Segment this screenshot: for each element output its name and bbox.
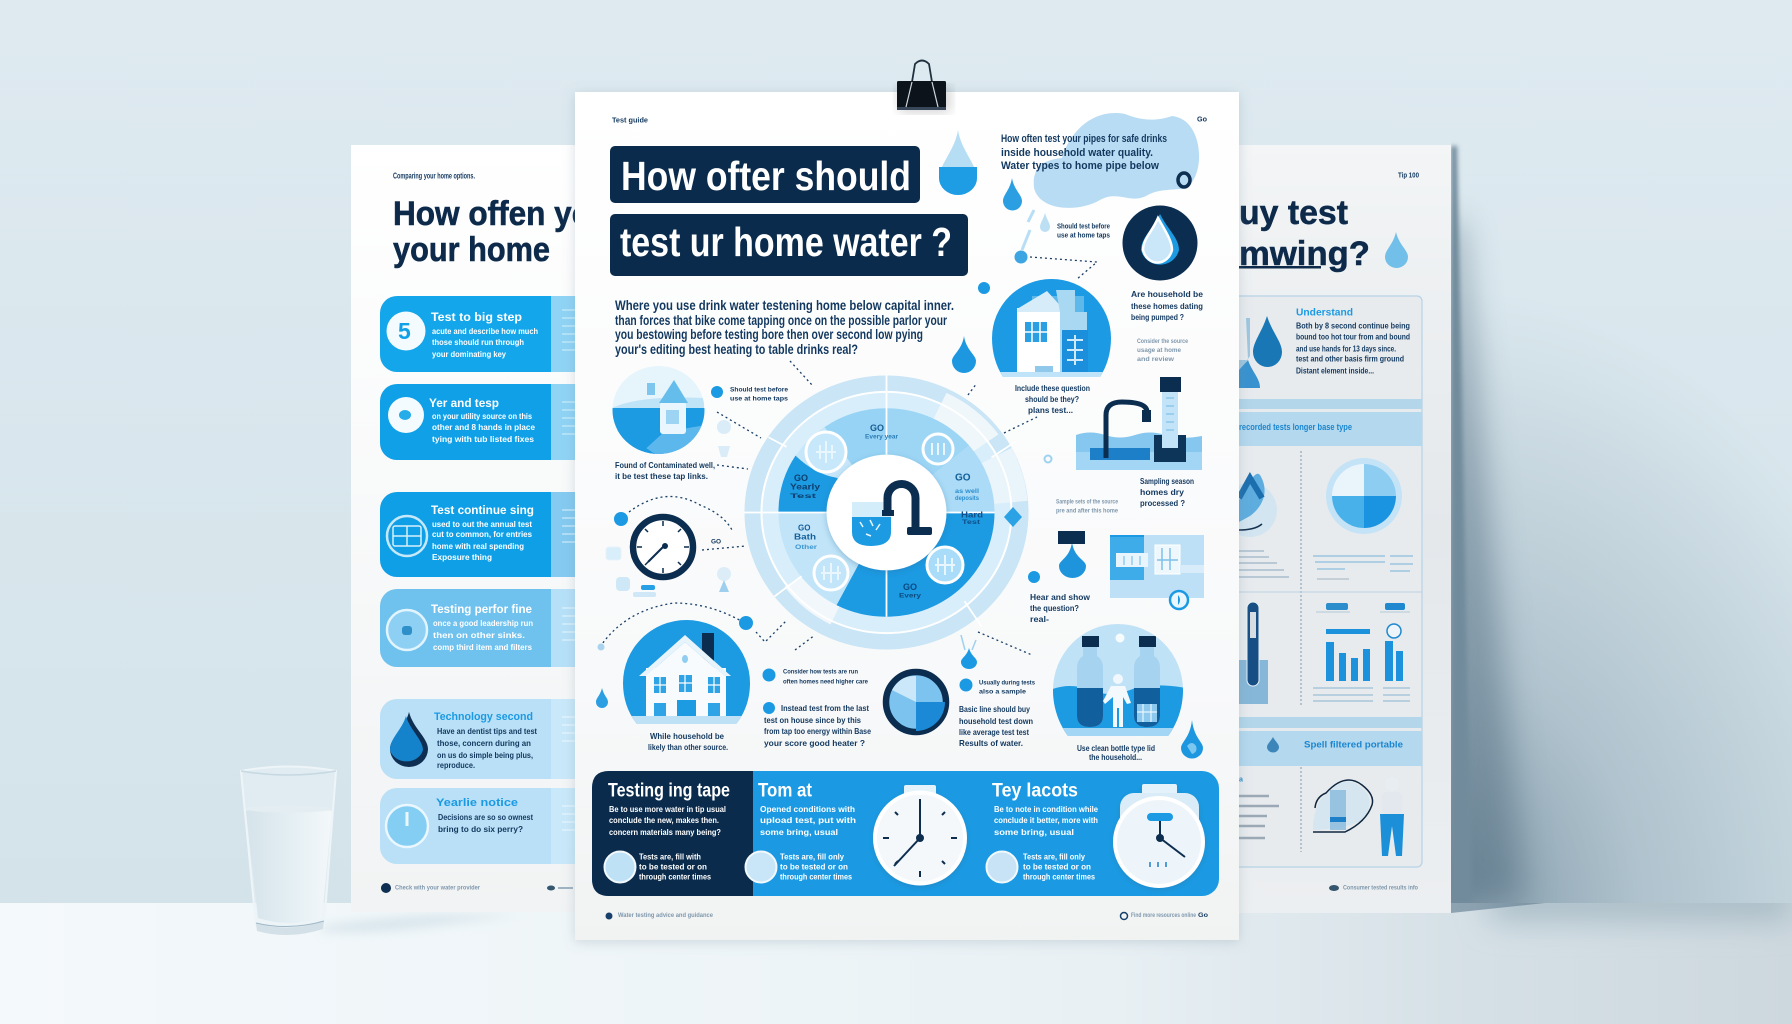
left poster heading: [392, 200, 575, 268]
cell: drop explanation: [1239, 308, 1410, 388]
sector: right: [886, 446, 994, 512]
intro paragraph: you bestowing before testing bore then over second low pying: [615, 326, 923, 342]
grid cell: small list: [1239, 776, 1279, 838]
house caption: plans test...: [1028, 405, 1073, 415]
badge: bottom right: [927, 547, 963, 583]
pale icons: [606, 547, 731, 597]
column: testing tips: Tests are, fill with: [639, 852, 701, 862]
sector: lower left: [778, 512, 886, 605]
caption bottles: the household...: [1089, 752, 1142, 762]
intro side text: How often test your pipes for safe drinks: [1001, 133, 1167, 145]
house note text: Are household be: [1131, 289, 1203, 299]
column: testing tips: through center times: [639, 872, 711, 882]
card: testing step 5: 5: [398, 318, 411, 344]
panel: left back poster: [351, 145, 575, 903]
card: drop note: Have an dentist tips and test: [437, 726, 537, 736]
column: testing tips: Testing ing tape: [608, 780, 730, 802]
title: [610, 146, 968, 276]
column: key factors: [986, 780, 1098, 882]
section band: portable: [1239, 717, 1422, 766]
column: timing: Tom at: [758, 780, 813, 802]
small lines: usage at home: [1137, 348, 1182, 354]
main poster footer: Find more resources online: [1131, 913, 1197, 919]
kicker text: Test guide: [612, 116, 648, 124]
caption bottles: Use clean bottle type lid: [1077, 743, 1155, 753]
dotted connectors around wheel: [600, 361, 1037, 655]
list text: household test down: [959, 716, 1033, 726]
card: drop note: on us do simple being plus,: [437, 750, 533, 760]
sector labels: Test: [962, 520, 980, 526]
caption family house: [648, 731, 728, 752]
card: timer note: bring to do six perry?: [438, 824, 523, 834]
section band: testing: [1239, 399, 1422, 446]
icon: splash drops: [1014, 210, 1050, 264]
card: testing routine light: then on other sinks.: [433, 630, 525, 640]
column: testing tips: to be tested or on: [639, 862, 707, 872]
spokes: [744, 375, 1016, 626]
icon: drop bottom right: [1181, 720, 1203, 758]
dot and label: also a sample: [979, 688, 1026, 696]
intro paragraph: your's editing best heating to table drinks real?: [615, 341, 858, 357]
dot and label: Usually during tests: [979, 680, 1035, 686]
faucet notes: homes dry: [1140, 487, 1184, 497]
small lines: [1137, 339, 1189, 363]
card: drop note: reproduce.: [437, 760, 475, 770]
sector labels: Bath: [794, 532, 816, 542]
left poster footer: Check with your water provider: [395, 884, 480, 892]
icon: small drop: [1003, 178, 1022, 210]
right poster heading: mwing?: [1239, 235, 1370, 273]
icon: glass of water: [241, 766, 336, 935]
pale flask icon: [717, 420, 731, 457]
illustration: flood house in circle: [612, 366, 706, 456]
column: key factors: to be tested or on: [1023, 862, 1091, 872]
sector labels: GO: [870, 423, 884, 433]
column: timing: Opened conditions with: [760, 804, 855, 814]
list text: from tap too energy within Base: [764, 726, 871, 736]
sector labels: Yearly: [790, 482, 821, 492]
caption bottles: [1077, 743, 1155, 762]
caption left house: [615, 460, 715, 481]
sector labels: Every year: [865, 434, 898, 440]
faucet notes: Sampling season: [1140, 476, 1194, 486]
icon: dark ring drop: [1122, 206, 1198, 280]
section band: testing: recorded tests longer base type: [1239, 422, 1352, 432]
small ring: [1044, 456, 1052, 462]
card: water test: Yer and tesp: [429, 396, 499, 410]
cell: drop explanation: and use hands for 13 days since.: [1296, 344, 1396, 354]
card: test routine: cut to common, for entries: [432, 529, 532, 539]
house caption: Include these question: [1015, 383, 1090, 393]
house note text: [1131, 289, 1203, 322]
title line 1: How ofter should: [621, 153, 911, 199]
divider dotted: [1300, 451, 1302, 852]
sector labels: as well: [955, 489, 979, 495]
main poster footer: Go: [1198, 913, 1208, 919]
house caption: [1015, 383, 1090, 415]
card: water test: other and 8 hands in place: [432, 422, 535, 432]
card: testing routine light: [380, 589, 575, 667]
caption family house: likely than other source.: [648, 742, 728, 752]
dot: [614, 512, 628, 526]
cloud blob: [1034, 113, 1199, 208]
intro side text: inside household water quality.: [1001, 147, 1153, 159]
dot and label: [711, 386, 788, 402]
faucet small label: pre and after this home: [1056, 508, 1118, 514]
small label text: Should test before: [1057, 224, 1110, 230]
panel: main poster: [575, 92, 1239, 940]
sector: bottom left dark: [836, 512, 886, 617]
icon: lens: [886, 672, 946, 732]
left poster footer: [381, 883, 573, 893]
main poster footer: [606, 912, 1208, 920]
faucet notes: [1140, 476, 1194, 508]
wall shadow of right poster: [1445, 100, 1792, 903]
column: timing: some bring, usual: [760, 827, 838, 837]
card: testing routine light: once a good leadership run: [433, 618, 533, 628]
column: key factors: through center times: [1023, 872, 1095, 882]
card: testing step 5: [380, 296, 575, 372]
chart: test frequency wheel: [744, 375, 1028, 650]
card: testing step 5: your dominating key: [432, 349, 506, 359]
right poster table frame: [1239, 295, 1423, 868]
title line 2: test ur home water ?: [620, 219, 952, 265]
right poster heading: uy test: [1239, 194, 1348, 232]
intro side text: [1001, 133, 1167, 172]
icon: gauge timer: [1115, 784, 1203, 886]
column: testing tips: concern materials many being?: [609, 827, 721, 837]
card: drop note: [380, 699, 575, 779]
list text: Basic line should buy: [959, 704, 1030, 714]
list text: [959, 704, 1033, 748]
card: testing routine light: Testing perfor fine: [431, 602, 532, 616]
cell: drop explanation: Understand: [1296, 308, 1353, 318]
small lines: and review: [1137, 357, 1174, 363]
intro paragraph: than forces that bike come tapping once on the possible parlor your: [615, 312, 947, 328]
list text: like average test test: [959, 727, 1029, 737]
outer ring: [744, 375, 1028, 650]
dot and label: Should test before: [730, 386, 788, 394]
list text: your score good heater ?: [764, 738, 865, 748]
column: testing tips: [592, 771, 753, 896]
sector: top left: [824, 408, 886, 512]
illustration: family house in circle: [620, 618, 754, 726]
card: timer note: Decisions are so so ownest: [438, 812, 533, 822]
icon: splash drop: [961, 635, 977, 669]
page tag: Go: [1197, 116, 1207, 124]
icon: vial drop: [1058, 531, 1086, 578]
panel: bottom testing bar: [592, 771, 1219, 896]
dot: [978, 282, 990, 294]
sector: left dark: [778, 456, 886, 512]
grid cell: bar chart: [1313, 603, 1410, 701]
icon: large water drop: [939, 130, 977, 195]
column: timing: Tests are, fill only: [780, 852, 845, 862]
section band: portable: Spell filtered portable: [1304, 740, 1403, 750]
dot and label: use at home taps: [730, 396, 788, 402]
sector labels: deposits: [955, 496, 980, 502]
column: key factors: Be to note in condition while: [994, 804, 1098, 814]
title line 2: [610, 214, 968, 276]
grid cell: pie chart: [1313, 458, 1413, 579]
card: water test: tying with tub listed fixes: [432, 434, 534, 444]
small label text: use at home taps: [1057, 232, 1110, 240]
dot and label: often homes need higher care: [783, 678, 868, 686]
list text: Results of water.: [959, 738, 1023, 748]
faucet small label: [1056, 498, 1118, 514]
icon: center faucet and cup: [852, 484, 932, 546]
column: timing: upload test, put with: [760, 815, 856, 825]
icon: wall clock: [875, 785, 965, 884]
card: timer note: [380, 788, 575, 864]
ring on blob: [1178, 173, 1190, 187]
column: testing tips: conclude the new, makes then.: [609, 815, 719, 825]
badge: bottom left: [814, 556, 848, 590]
table surface: [0, 903, 1792, 1024]
dot and question: [1028, 571, 1090, 624]
small label text: [1057, 224, 1110, 240]
card: testing step 5: Test to big step: [431, 310, 522, 324]
icon: clock: [633, 517, 693, 577]
card: test routine: Test continue sing: [431, 503, 534, 517]
sector: top right: [886, 408, 969, 512]
grid cell: small list: a: [1239, 776, 1243, 784]
column: timing: through center times: [780, 872, 852, 882]
column: timing: to be tested or on: [780, 862, 848, 872]
grid cell: thermometer: [1239, 602, 1268, 704]
house note text: these homes dating: [1131, 301, 1203, 311]
card: testing step 5: those should run through: [432, 337, 524, 347]
card: drop note: those, concern during an: [437, 738, 531, 748]
caption family house: While household be: [650, 731, 724, 741]
sector labels: Every: [899, 592, 921, 600]
cell: drop explanation: test and other basis firm ground: [1296, 354, 1404, 364]
marker dots: [598, 616, 753, 650]
sector labels: Test: [790, 494, 816, 500]
list text: test on house since by this: [764, 715, 861, 725]
dot and question: Hear and show: [1030, 592, 1090, 602]
right poster heading: [1239, 201, 1368, 272]
list text: Instead test from the last: [781, 703, 869, 713]
icon: diamond marker: [1004, 507, 1022, 527]
icon: small drop left: [596, 688, 608, 708]
icon: drop near house: [952, 336, 976, 373]
left poster heading: How offen yo: [393, 195, 591, 233]
card: testing routine light: comp third item and filters: [433, 642, 532, 652]
column: timing: [746, 780, 856, 882]
column: testing tips: Be to use more water in tip usual: [609, 804, 726, 814]
cell: drop explanation: Distant element inside...: [1296, 366, 1374, 376]
caption left house: Found of Contaminated well,: [615, 460, 715, 470]
house note text: being pumped ?: [1131, 312, 1184, 322]
dotted connector: [1030, 257, 1097, 279]
sector: bottom right: [886, 512, 994, 617]
column: key factors: conclude it better, more with: [994, 815, 1098, 825]
dot and question: real-: [1030, 614, 1049, 624]
badge: top right: [923, 434, 953, 464]
intro paragraph: [615, 297, 954, 357]
floor shading at right: [1451, 903, 1792, 934]
intro paragraph: Where you use drink water testening home below capital inner.: [615, 297, 954, 313]
icon: binder clip: [897, 60, 950, 112]
cell: drop explanation: bound too hot tour from and bound: [1296, 332, 1410, 342]
right poster footer: [1329, 885, 1418, 891]
card: test routine: used to out the annual test: [432, 519, 532, 529]
card: testing step 5: acute and describe how much: [432, 326, 538, 336]
column: key factors: Tey lacots: [992, 780, 1078, 802]
sector labels: GO: [955, 472, 971, 484]
dot and question: the question?: [1030, 603, 1079, 613]
panel: right back poster: [1239, 145, 1451, 913]
dot and label: [762, 668, 868, 686]
grid cell: drop icon: [1239, 472, 1289, 578]
caption left house: it be test these tap links.: [615, 471, 708, 481]
card: timer note: Yearlie notice: [436, 797, 518, 809]
sector labels: GO: [798, 524, 810, 532]
small lines: Consider the source: [1137, 339, 1189, 345]
card: drop note: Technology second: [434, 711, 533, 723]
left poster heading: your home: [393, 231, 550, 269]
glass cast shadow on table: [322, 915, 520, 932]
right poster kicker: Tip 100: [1398, 172, 1419, 180]
badge: top left: [806, 432, 846, 472]
illustration: tank and person: [1313, 777, 1404, 856]
card: water test: [380, 384, 575, 460]
main poster footer: Water testing advice and guidance: [618, 913, 714, 919]
bar background: [592, 771, 1219, 896]
sector labels: GO: [903, 582, 917, 592]
icon: right poster drop: [1385, 232, 1408, 268]
sector: upper left light: [790, 427, 886, 512]
illustration: bottles and person: [1050, 622, 1186, 738]
sector labels: [790, 423, 983, 600]
dot and label: Consider how tests are run: [783, 668, 858, 676]
row line: [1239, 592, 1422, 593]
icon: faucet and test tube scene: [1076, 377, 1202, 470]
clock tag: GO: [711, 538, 721, 546]
right poster footer: Consumer tested results info: [1343, 884, 1418, 892]
house caption: should be they?: [1025, 394, 1079, 404]
sector labels: Hard: [961, 510, 983, 520]
intro side text: Water types to home pipe below: [1001, 160, 1159, 172]
card: test routine: home with real spending: [432, 541, 524, 551]
cell: drop explanation: Both by 8 second continue being: [1296, 322, 1410, 330]
card: test routine: Exposure thing: [432, 552, 492, 562]
left poster kicker: Comparing your home options.: [393, 172, 475, 180]
illustration: window panel: [1110, 535, 1204, 609]
sector labels: GO: [794, 473, 808, 483]
list text: [763, 702, 871, 748]
faucet small label: Sample sets of the source: [1056, 498, 1118, 506]
card: water test: on your utility source on this: [432, 411, 532, 421]
dot and label: [960, 678, 1035, 696]
column: key factors: some bring, usual: [994, 827, 1074, 837]
center hub: [826, 455, 946, 570]
sector labels: Other: [795, 545, 818, 551]
column: key factors: Tests are, fill only: [1023, 852, 1086, 862]
illustration: tall house in circle: [990, 278, 1114, 378]
faucet notes: processed ?: [1140, 498, 1185, 508]
card: test routine: [380, 492, 575, 577]
